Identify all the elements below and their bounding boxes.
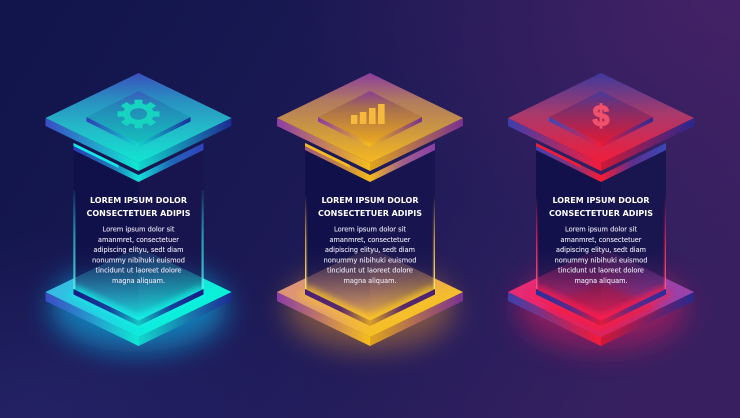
top slab: [508, 73, 694, 171]
body text: [554, 226, 648, 285]
heading: LOREM IPSUM DOLOR: [552, 196, 650, 205]
glass column: [536, 143, 666, 320]
inner plate: [549, 91, 653, 148]
heading: CONSECTETUER ADIPIS: [549, 209, 653, 218]
heading: LOREM IPSUM DOLOR: [322, 196, 418, 205]
heading: LOREM IPSUM DOLOR: [90, 196, 187, 205]
glass column: [74, 190, 204, 320]
base slab: [508, 247, 694, 346]
pillar: gold chart: [277, 73, 463, 350]
body text: Lorem ipsum dolor sit: [334, 226, 406, 234]
body text: nonummy nibihuki euismod: [554, 256, 648, 264]
heading: CONSECTETUER ADIPIS: [318, 209, 422, 218]
middle ledge: [74, 143, 204, 182]
body text: amanmret, consectetuer: [330, 236, 411, 244]
glow: teal floor: [50, 264, 226, 352]
body text: amanmret, consectetuer: [98, 236, 179, 244]
glow: red floor: [517, 266, 685, 350]
body text: nonummy nibihuki euismod: [324, 256, 416, 264]
base slab: [277, 247, 463, 346]
top slab: [46, 73, 232, 171]
middle ledge: [305, 143, 435, 182]
icon: gear: [118, 100, 160, 128]
body text: adipiscing elityu, sedt diam: [325, 246, 415, 254]
top slab: [277, 73, 463, 171]
body text: [92, 226, 185, 285]
body text: amanmret, consectetuer: [560, 236, 642, 244]
base slab: [46, 247, 232, 346]
inner plate: [86, 91, 190, 148]
body text: [324, 226, 416, 285]
heading: [549, 196, 653, 218]
glow: gold floor: [286, 266, 454, 350]
middle ledge: [536, 143, 666, 182]
icon: bars: [351, 104, 385, 124]
pillar: teal settings: [46, 73, 232, 352]
heading: CONSECTETUER ADIPIS: [86, 209, 191, 218]
body text: magna aliquam.: [112, 277, 165, 285]
body text: Lorem ipsum dolor sit: [565, 226, 637, 234]
pillar: red dollar: [508, 73, 694, 350]
body text: Lorem ipsum dolor sit: [102, 226, 175, 234]
body text: tincidunt ut laoreet dolore: [96, 266, 182, 274]
body text: nonummy nibihuki euismod: [92, 256, 185, 264]
body text: adipiscing elityu, sedt diam: [556, 246, 646, 254]
body text: tincidunt ut laoreet dolore: [327, 266, 413, 274]
heading: [318, 196, 422, 218]
body text: magna aliquam.: [344, 277, 396, 285]
glass column: [305, 143, 435, 320]
heading: [86, 196, 191, 218]
icon: dollar: $: [593, 100, 610, 133]
body text: adipiscing elityu, sedt diam: [94, 246, 184, 254]
body text: magna aliquam.: [574, 277, 628, 285]
inner plate: [318, 91, 422, 148]
body text: tincidunt ut laoreet dolore: [558, 266, 644, 274]
